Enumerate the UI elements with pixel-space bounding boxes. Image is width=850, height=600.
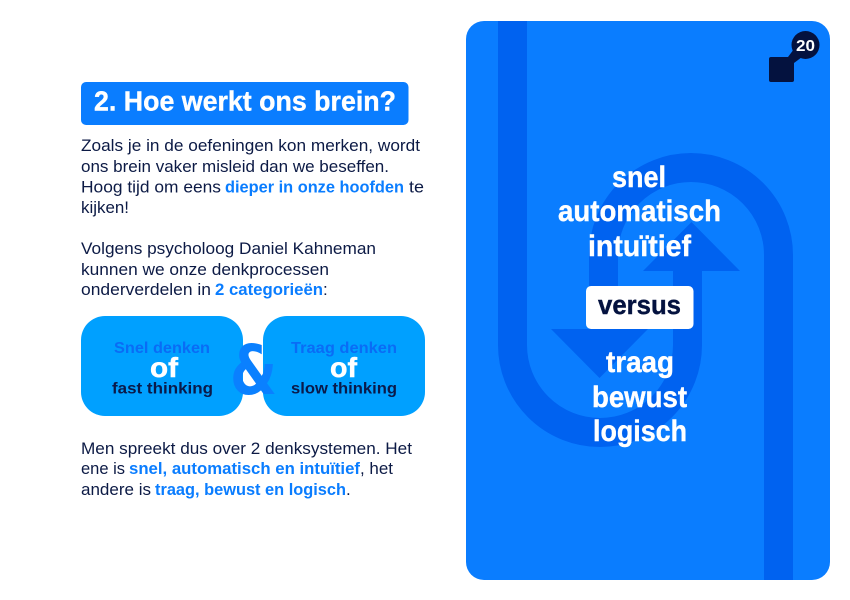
text block: traag bewust logisch <box>592 346 687 448</box>
ampersand: & <box>230 331 277 411</box>
text block: denksystemen: snel, automatisch en intuïtief <box>129 459 360 478</box>
text block: intro: kijken! <box>81 198 129 217</box>
text block: Kahneman: Volgens psycholoog Daniel Kahneman <box>81 239 376 258</box>
text block: denksystemen: traag, bewust en logisch <box>155 480 346 499</box>
text block: denksystemen: andere is <box>81 480 151 499</box>
card: snel denken: of <box>150 352 179 383</box>
text block: traag bewust logisch: logisch <box>593 415 687 448</box>
text block: intro: ons brein vaker misleid dan we beseffen. <box>81 157 389 176</box>
page number badge: 20 <box>796 38 815 55</box>
heading: 2. Hoe werkt ons brein? <box>94 86 396 116</box>
text block: denksystemen: ene is <box>81 459 125 478</box>
text block: snel automatisch intuïtief <box>558 161 721 263</box>
text block: denksystemen: . <box>346 480 351 499</box>
card: traag denken: of <box>330 352 358 383</box>
text block: snel automatisch intuïtief: snel <box>612 161 666 194</box>
text block: Kahneman: : <box>323 280 328 299</box>
text block: intro: te <box>409 178 424 196</box>
text block: snel automatisch intuïtief: intuïtief <box>588 230 691 263</box>
card: traag denken: slow thinking <box>291 380 397 398</box>
text block: traag bewust logisch: traag <box>606 346 674 379</box>
text block: traag bewust logisch: bewust <box>592 381 687 414</box>
heading <box>81 82 408 125</box>
card: snel denken: Snel denken <box>114 340 210 357</box>
card: snel denken: fast thinking <box>112 380 213 398</box>
text block: Kahneman: 2 categorieën <box>215 280 323 299</box>
page number badge <box>769 31 820 82</box>
text block: Kahneman: kunnen we onze denkprocessen <box>81 260 329 279</box>
text block: denksystemen <box>81 439 412 499</box>
text block: Kahneman <box>81 239 376 299</box>
versus label <box>586 286 694 329</box>
text block: intro: Hoog tijd om eens <box>81 178 221 196</box>
text block: denksystemen: , het <box>360 459 393 478</box>
card: traag denken <box>263 316 425 416</box>
card: snel denken <box>81 316 243 416</box>
card: traag denken: Traag denken <box>291 340 397 357</box>
versus label: versus <box>598 290 681 320</box>
text block: Kahneman: onderverdelen in <box>81 280 211 299</box>
text block: denksystemen: Men spreekt dus over 2 denksystemen. Het <box>81 439 412 458</box>
text block: intro: Zoals je in de oefeningen kon merken, wordt <box>81 136 420 155</box>
arrow: upward loop <box>551 168 778 580</box>
arrow: downward loop <box>512 21 740 432</box>
text block: intro <box>81 136 424 217</box>
panel: snel versus traag <box>466 21 830 580</box>
panel background <box>466 21 830 580</box>
text block: snel automatisch intuïtief: automatisch <box>558 195 721 228</box>
text block: intro: dieper in onze hoofden <box>225 178 404 196</box>
